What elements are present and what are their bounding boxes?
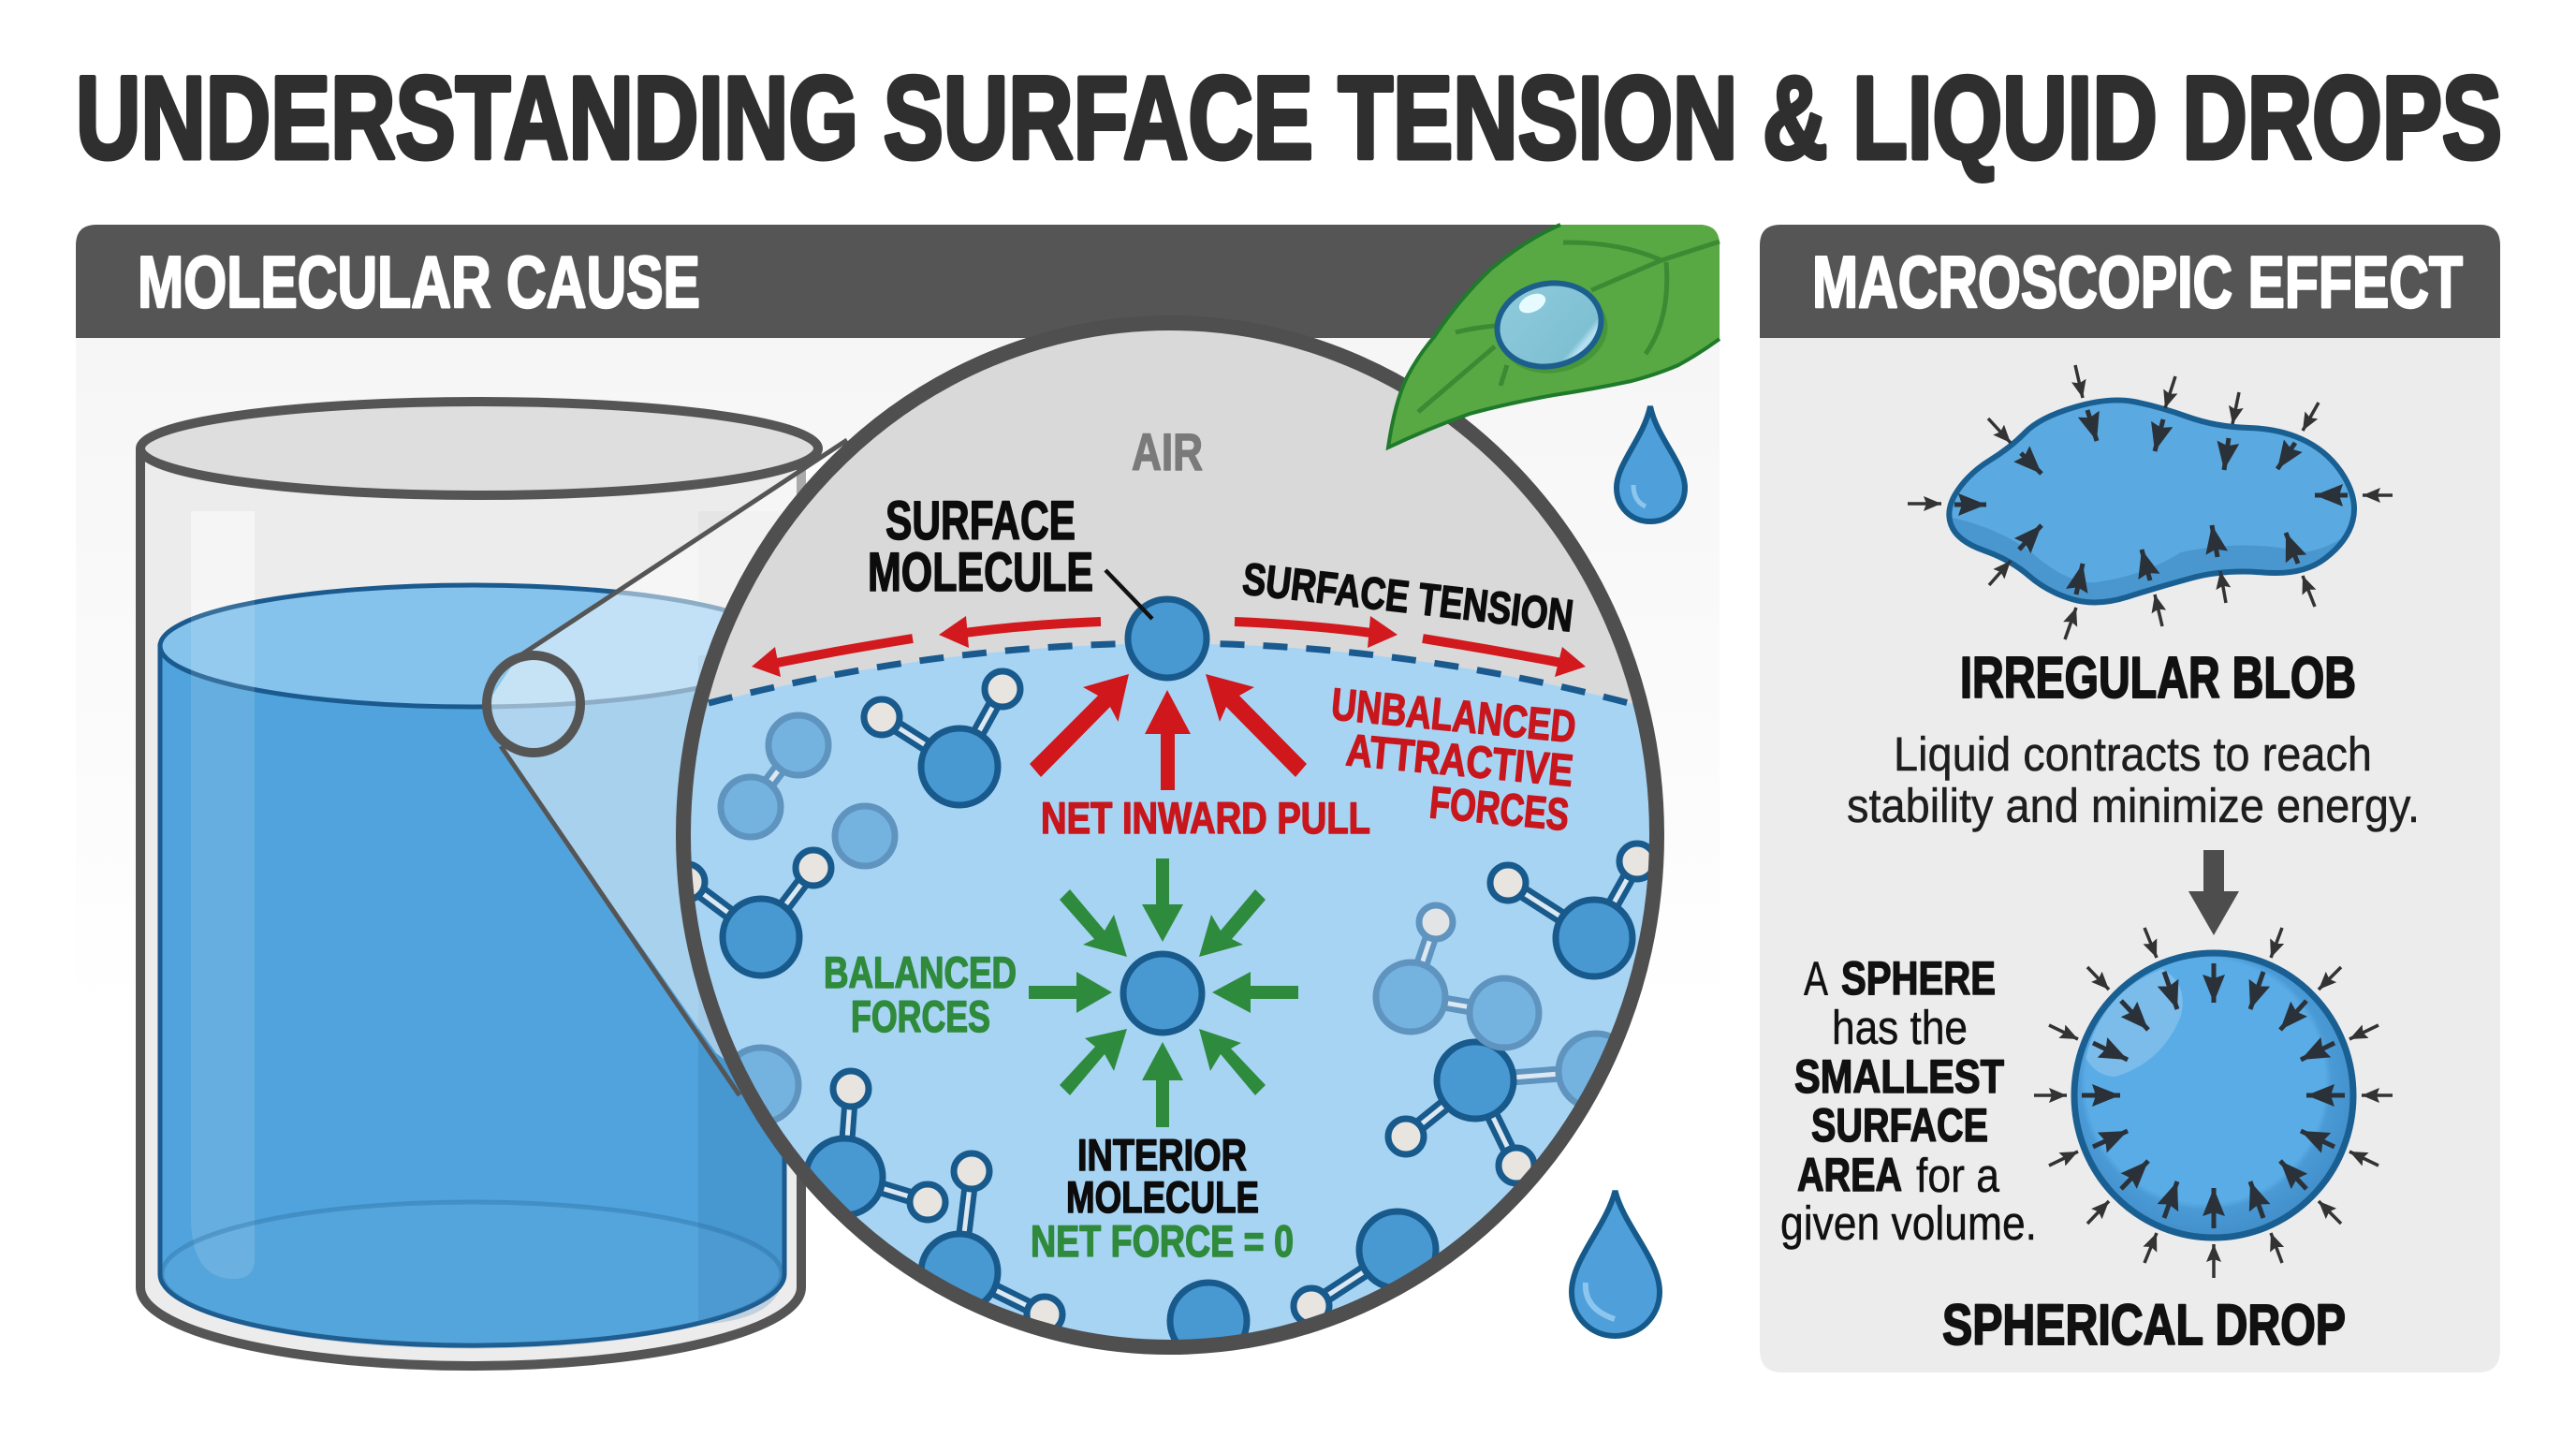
icon: water drop bottom right <box>1572 1191 1660 1336</box>
surface molecule <box>1128 599 1207 678</box>
label: net force zero: NET FORCE = 0 <box>1031 1216 1294 1266</box>
icon: leaf with droplet <box>1388 225 1720 448</box>
beaker rim <box>140 402 818 495</box>
glass highlight stripe <box>191 599 255 1279</box>
text: sphere explanation: AREA <box>1797 1149 1902 1201</box>
beaker floor ellipse <box>162 1202 782 1346</box>
molecule: bottom left <box>921 1153 1062 1332</box>
label: unbalanced attractive forces: UNBALANCED <box>1329 680 1578 753</box>
irregular blob <box>1946 397 2357 605</box>
molecule: left <box>669 850 831 976</box>
liquid surface dashed line <box>709 643 1629 703</box>
air region <box>683 323 1657 1347</box>
label: balanced forces: FORCES <box>851 991 990 1041</box>
water surface <box>160 585 784 707</box>
arrows: surface tension left <box>752 616 1101 677</box>
arrows: surface tension right <box>1235 616 1586 677</box>
text: liquid contracts <box>1847 727 2420 832</box>
water body <box>160 646 784 1345</box>
text: sphere explanation: given volume. <box>1780 1196 2037 1250</box>
panel header bar: molecular cause <box>76 225 1720 338</box>
magnifier wedge <box>487 440 1030 1217</box>
liquid region <box>691 644 1649 1340</box>
molecule: right cluster <box>1388 1034 1633 1183</box>
panel header bar: macroscopic effect <box>1760 225 2500 338</box>
sphere arrows inside <box>2082 963 2345 1228</box>
text: sphere explanation: A <box>1804 952 1828 1005</box>
arrows: net inward pull <box>1030 674 1307 790</box>
panel: macroscopic effect <box>1760 225 2500 1372</box>
blob lower shade <box>1953 518 2340 599</box>
label: air: AIR <box>1132 422 1203 481</box>
text: sphere explanation: SMALLEST <box>1794 1050 2004 1103</box>
leaf droplet <box>1489 273 1609 376</box>
icon: water drop top right <box>1617 406 1685 521</box>
glass shade stripe <box>698 655 783 1325</box>
label: balanced forces: BALANCED <box>824 947 1017 997</box>
label: interior molecule <box>1031 1130 1294 1266</box>
blob arrows outside <box>1908 365 2393 639</box>
molecule: faded pair <box>721 715 828 837</box>
label: spherical drop: SPHERICAL DROP <box>1942 1293 2346 1357</box>
pointer line <box>1105 570 1152 619</box>
text: sphere explanation: has the <box>1832 1001 1968 1054</box>
blob arrows inside <box>1954 410 2348 594</box>
lens outline <box>683 323 1657 1347</box>
label: net inward pull: NET INWARD PULL <box>1041 793 1370 843</box>
spherical drop <box>2074 953 2353 1238</box>
molecule: bottom centre <box>1166 1279 1251 1340</box>
label: surface tension: SURFACE TENSION <box>1240 554 1575 641</box>
molecule: bottom right <box>1294 1211 1436 1324</box>
magnified circle <box>655 323 1685 1404</box>
background molecules <box>669 671 1655 1359</box>
sphere highlight <box>2086 969 2183 1077</box>
text: sphere explanation: for a <box>1916 1149 2000 1202</box>
molecule: faded right <box>1376 905 1539 1048</box>
panel: molecular cause <box>76 225 1720 1372</box>
molecule: lower left <box>806 1071 945 1220</box>
label: surface molecule: SURFACE <box>886 491 1076 551</box>
text: sphere explanation <box>1780 952 2037 1250</box>
beaker of water <box>140 402 818 1366</box>
label: interior molecule: INTERIOR <box>1077 1130 1247 1180</box>
label: unbalanced attractive forces <box>1329 680 1578 841</box>
label: interior molecule: MOLECULE <box>1066 1172 1259 1222</box>
arrow: blob to sphere <box>2188 850 2239 935</box>
blob outline <box>1949 400 2354 602</box>
molecule: upper <box>864 671 1020 805</box>
label: surface molecule: MOLECULE <box>868 542 1093 603</box>
arrows: balanced forces <box>1029 858 1298 1127</box>
text: liquid contracts: stability and minimize energy. <box>1847 779 2420 832</box>
text: sphere explanation: SPHERE <box>1841 952 1996 1005</box>
text: liquid contracts: Liquid contracts to reach <box>1894 727 2372 781</box>
molecule: faded single <box>835 806 895 866</box>
heading: molecular cause: MOLECULAR CAUSE <box>138 241 700 323</box>
interior molecule <box>1123 954 1202 1033</box>
label: unbalanced attractive forces: ATTRACTIVE <box>1344 726 1575 797</box>
beaker outline <box>140 449 801 1366</box>
label: irregular blob: IRREGULAR BLOB <box>1960 646 2356 711</box>
label: balanced forces <box>824 947 1017 1041</box>
molecule: faded partial left <box>724 1048 798 1123</box>
molecule: upper right <box>1490 844 1655 976</box>
magnifier small ring <box>487 655 580 753</box>
sphere arrows outside <box>2034 928 2393 1278</box>
label: surface molecule <box>868 491 1093 603</box>
label: unbalanced attractive forces: FORCES <box>1427 778 1571 841</box>
text: sphere explanation: SURFACE <box>1811 1099 1988 1152</box>
